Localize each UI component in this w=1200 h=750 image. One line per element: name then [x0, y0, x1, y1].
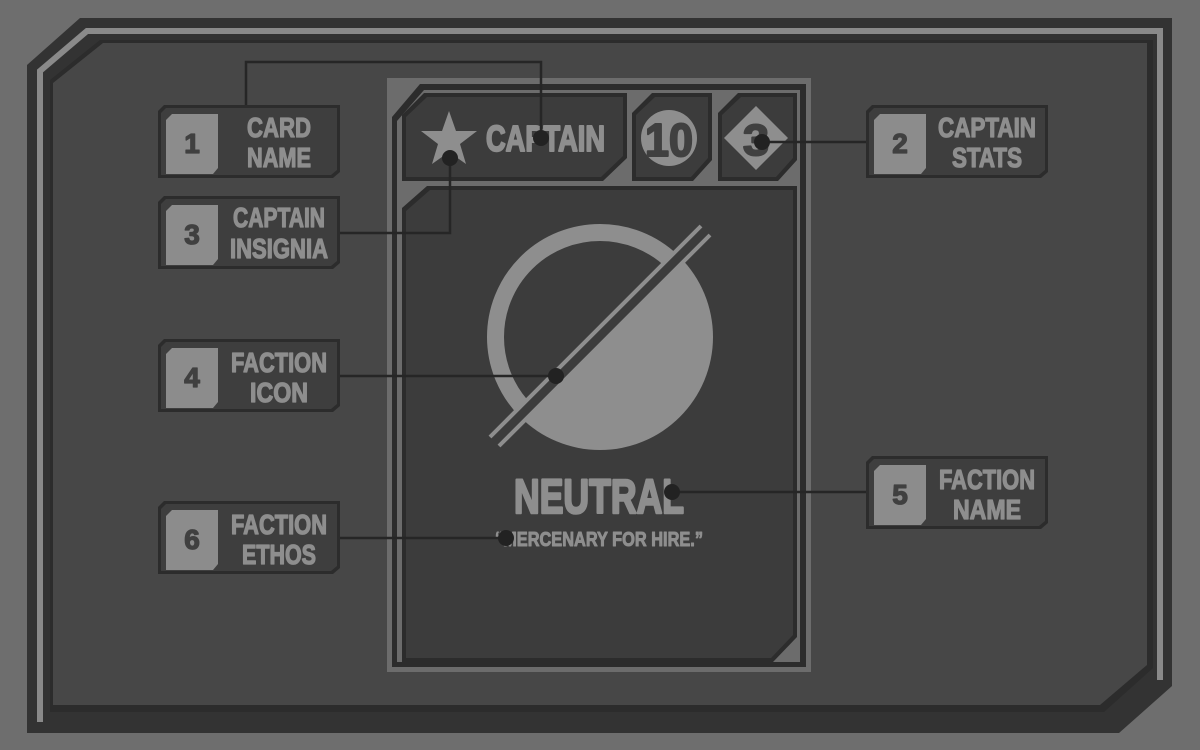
icon: star [421, 111, 477, 164]
label 4: faction icon [158, 339, 340, 412]
label 2: captain stats: CAPTAIN [938, 112, 1036, 143]
faction icon [487, 224, 713, 450]
card body [402, 186, 797, 662]
card header: name: CAPTAIN [486, 118, 605, 159]
label 4: faction icon: 4 [184, 362, 200, 393]
connector lines [246, 62, 866, 538]
faction ethos: “MERCENARY FOR HIRE.” [495, 529, 703, 551]
label 5: faction name: 5 [892, 479, 908, 510]
label 1: card name: 1 [184, 128, 200, 159]
label 4: faction icon: FACTION [231, 347, 327, 378]
label 5: faction name [866, 456, 1048, 529]
label 3: captain insignia [158, 196, 340, 269]
label 3: captain insignia: 3 [184, 219, 200, 250]
label 6: faction ethos: 6 [184, 524, 200, 555]
label 1: card name [158, 105, 340, 178]
label 3: captain insignia: CAPTAIN [233, 202, 325, 233]
card header: stat 3 [718, 93, 797, 181]
label 4: faction icon: ICON [250, 377, 308, 408]
card [387, 78, 811, 672]
card header: name [402, 93, 627, 181]
card header: cost 10: 10 [645, 114, 693, 166]
label 5: faction name: FACTION [939, 464, 1035, 495]
label 2: captain stats: STATS [952, 142, 1022, 173]
label 2: captain stats: 2 [892, 128, 908, 159]
label 3: captain insignia: INSIGNIA [230, 233, 328, 264]
label 6: faction ethos [158, 501, 340, 574]
faction name: NEUTRAL [514, 471, 684, 524]
label 6: faction ethos: ETHOS [242, 539, 316, 570]
connector dots [442, 130, 770, 546]
label 1: card name: NAME [247, 142, 311, 173]
label 5: faction name: NAME [953, 494, 1021, 525]
label 6: faction ethos: FACTION [231, 509, 327, 540]
label 1: card name: CARD [247, 112, 311, 143]
card header: cost 10 [632, 93, 712, 181]
card header: stat 3: 3 [743, 116, 769, 165]
label 2: captain stats [866, 105, 1048, 178]
